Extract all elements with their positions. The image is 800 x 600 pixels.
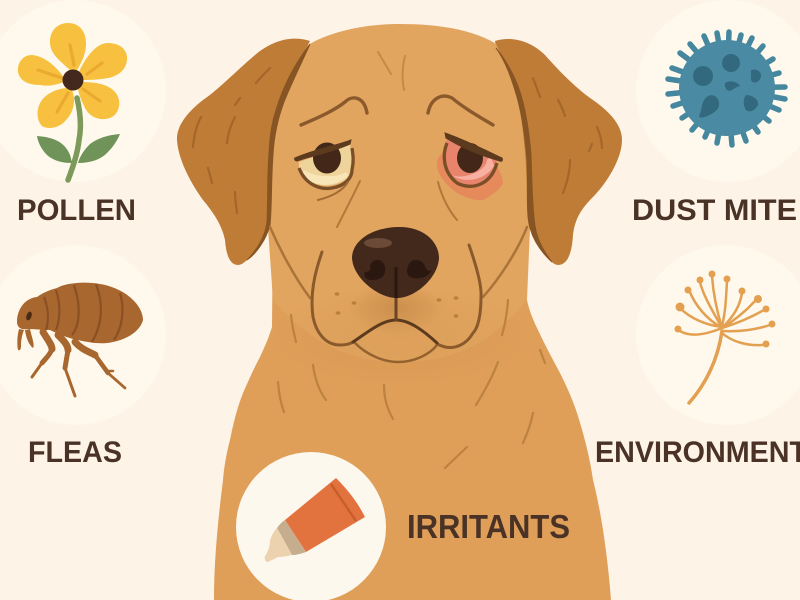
right eye irritated <box>437 133 503 200</box>
right ear <box>495 39 622 265</box>
fleas icon group <box>0 245 166 469</box>
flower center <box>62 70 84 90</box>
label: fleas: FLEAS <box>28 436 122 469</box>
dust mite circle <box>636 0 800 182</box>
nose <box>352 227 439 298</box>
neck shading under the head <box>270 285 530 385</box>
eyebrows <box>301 96 493 125</box>
flower stem and leaves <box>37 98 120 180</box>
left ear <box>177 39 310 265</box>
label: irritants: IRRITANTS <box>407 508 570 545</box>
forehead wrinkles <box>378 52 405 90</box>
whisker dots <box>335 292 458 318</box>
body fur marks <box>278 300 545 468</box>
flea <box>17 283 143 396</box>
pollen icon group <box>0 0 166 227</box>
label: pollen: POLLEN <box>17 194 136 227</box>
flower petals <box>18 23 127 128</box>
dust mite icon group <box>632 0 800 227</box>
dog illustration <box>177 24 622 600</box>
muzzle and mouth <box>270 227 527 362</box>
dog body <box>214 220 611 600</box>
pollen circle <box>0 0 166 182</box>
label: dust mite: DUST MITE <box>632 194 797 227</box>
dust mite <box>668 32 785 145</box>
environment circle <box>636 245 800 425</box>
dog head <box>268 24 530 362</box>
left eye <box>295 140 353 188</box>
dandelion plant <box>674 270 776 403</box>
irritants icon group <box>236 452 570 600</box>
environment icon group <box>595 245 800 469</box>
irritants circle <box>236 452 386 600</box>
tube of irritant <box>265 478 365 562</box>
under-eye creases <box>318 181 457 227</box>
fleas circle <box>0 245 166 425</box>
